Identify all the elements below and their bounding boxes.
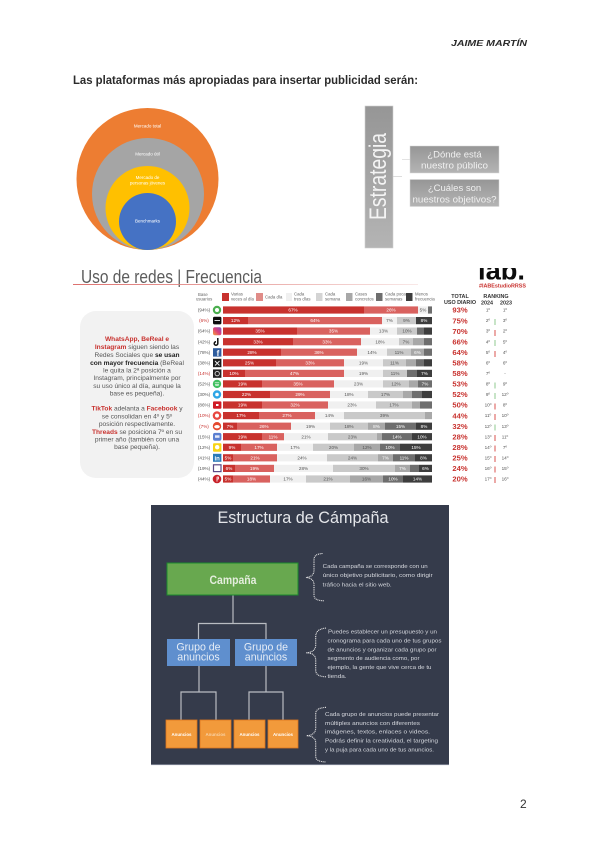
row: Reddit: 8% <box>373 424 380 429</box>
panel: social network frequency chart <box>73 256 526 484</box>
row: Reddit: 32% <box>452 422 468 431</box>
row: BeReal: 7% <box>386 318 393 323</box>
text: ads note <box>325 712 439 754</box>
text: ad group note: tienda. <box>328 674 347 680</box>
row: YouTube: 10º <box>485 403 492 408</box>
row: Twitch: 6% <box>422 466 429 471</box>
chart legend <box>196 292 435 302</box>
row: LinkedIn <box>198 454 509 462</box>
row: Instagram: 2º <box>503 329 507 334</box>
row: BeReal: 12% <box>231 318 240 323</box>
text: ads note: Podrás definir la creatividad, el targeting <box>325 738 438 744</box>
row: Threads: 58% <box>452 369 468 378</box>
row: YouTube: 50% <box>452 401 468 410</box>
row: Twitch: (19%) <box>198 466 211 471</box>
row: Telegram: 12º <box>502 392 509 397</box>
heading: platforms: Las plataformas más apropiadas para insertar publicidad serán: <box>73 75 418 87</box>
chart legend: concretos <box>355 296 374 302</box>
row: Discord: 14% <box>392 434 402 439</box>
callout: key findings: base pequeña). <box>114 444 160 451</box>
row: Pinterest: (44%) <box>198 477 211 482</box>
chart legend: Cada <box>325 292 336 296</box>
row: Reddit: 18% <box>344 424 354 429</box>
row: Instagram: 35% <box>329 329 338 334</box>
text: ad group note: segmento de audiencia como, por <box>328 656 420 662</box>
row: WhatsApp: 26% <box>386 308 396 313</box>
row: Facebook: f <box>217 349 220 358</box>
row: Reddit: 26% <box>259 424 269 429</box>
row: Twitch: 7% <box>399 466 406 471</box>
box: ad 4: Anuncios <box>273 732 294 737</box>
row: Facebook: 64% <box>452 348 468 357</box>
row: X: 25% <box>245 360 254 365</box>
row: LinkedIn: 8% <box>420 455 427 460</box>
row: Snapchat: 7º <box>503 445 507 450</box>
row: Pinterest: 18% <box>247 477 256 482</box>
text: ad group note: ejemplo, la gente que vive cerca de tu <box>328 665 432 671</box>
row: LinkedIn: 24% <box>348 455 357 460</box>
chart legend: Menos <box>415 292 428 296</box>
row: BeReal: 9% <box>403 318 410 323</box>
row: Discord: 13º <box>485 434 492 439</box>
row: TikTok: 33% <box>322 339 332 344</box>
row: Telegram: 18% <box>344 392 354 397</box>
row: Tinder-style app <box>198 411 509 420</box>
row: Twitch: 16º <box>485 466 492 471</box>
row: Facebook <box>198 348 507 358</box>
panel: campaign structure <box>151 505 449 765</box>
row: Tinder-style app: 39% <box>380 413 389 418</box>
strategy diagram: nuestro público <box>421 160 488 172</box>
brace: ad group note <box>306 628 326 677</box>
row: Facebook: 6% <box>414 350 421 355</box>
row: Twitch: 15º <box>502 466 509 471</box>
row: Instagram: 3º <box>486 329 490 334</box>
iab logo: iab. <box>478 256 525 286</box>
row: LinkedIn: 24% <box>297 455 307 460</box>
row: TikTok: 66% <box>452 337 468 346</box>
header: author name: JAIME MARTÍN <box>451 38 528 48</box>
row: Spotify: 7% <box>422 382 428 386</box>
row: Discord: 23% <box>348 434 357 439</box>
text: ad group note: cronograma para cada uno de tus grupos <box>328 638 442 644</box>
nested circles diagram: Mercado total <box>134 124 161 128</box>
row: Discord: 10% <box>417 434 427 439</box>
nested circles diagram: personas jóvenes <box>130 180 166 186</box>
row: Threads: 47% <box>290 371 299 376</box>
row: Reddit: 13º <box>502 424 509 429</box>
column headers: RANKING <box>483 294 509 300</box>
callout: key findings: su uso único al día, aunque la <box>93 383 181 390</box>
chart title: Uso de redes | Frecuencia <box>81 267 263 287</box>
callout: key findings: WhatsApp, BeReal e <box>105 336 169 343</box>
row: LinkedIn: 5% <box>225 455 231 460</box>
row: Spotify: 23% <box>354 382 363 386</box>
row: Telegram: 52% <box>452 390 468 399</box>
row: Pinterest <box>198 475 509 484</box>
box: ad group 1: Grupo de <box>176 642 221 654</box>
box: ad 4 <box>268 720 298 748</box>
row: Snapchat: 20% <box>329 445 338 450</box>
row: Spotify: 12% <box>391 382 401 386</box>
row: Reddit <box>199 422 509 431</box>
row: Reddit: 19% <box>306 424 315 429</box>
row: Telegram: (30%) <box>198 392 211 397</box>
row: Snapchat <box>198 443 507 452</box>
row: LinkedIn: in <box>215 456 220 462</box>
nested circles diagram: Mercado útil <box>135 152 160 156</box>
row: Telegram: 29% <box>295 392 305 397</box>
row: Twitch: 28% <box>299 466 308 471</box>
row: Snapchat: 14º <box>485 445 492 450</box>
row: Snapchat: (12%) <box>198 445 211 450</box>
callout: key findings: TikTok adelanta a Facebook y <box>91 406 183 412</box>
row: Snapchat: 10% <box>385 445 395 450</box>
row: Facebook: (78%) <box>198 350 211 355</box>
column headers: TOTAL <box>451 294 469 300</box>
row: YouTube: 8º <box>503 403 507 408</box>
row: Facebook: 14% <box>367 350 377 355</box>
row: Pinterest: 5% <box>225 477 231 482</box>
chart legend: Varias <box>231 292 243 296</box>
row: YouTube: 17% <box>389 403 399 408</box>
row: Tinder-style app: (10%) <box>198 413 211 418</box>
chart legend: Base <box>198 292 208 297</box>
chart legend: frecuencia <box>415 296 435 302</box>
chart legend: tres días <box>294 296 310 302</box>
row: Instagram: 70% <box>452 327 468 336</box>
row: X: 33% <box>305 360 315 365</box>
nested circles diagram: Benchmarks <box>135 218 161 224</box>
column headers: 2023 <box>500 300 512 306</box>
row: Discord <box>198 432 509 441</box>
callout: key findings: base es pequeña). <box>110 390 164 398</box>
box: ad group 1 <box>167 639 230 666</box>
chart legend: Cada <box>294 292 305 296</box>
connector lines <box>181 595 283 720</box>
strategy diagram: Estrategia <box>365 132 392 220</box>
row: X: 6º <box>486 360 490 365</box>
row: BeReal: 64% <box>310 318 320 323</box>
row: Spotify <box>198 380 507 389</box>
box: ad 3: Anuncios <box>239 732 260 737</box>
nested circles diagram <box>76 108 218 250</box>
chart legend: semanas <box>385 296 402 302</box>
row: Discord: 21% <box>301 434 311 439</box>
box: ad group 2 <box>235 639 297 666</box>
row: Twitch: 19% <box>250 466 259 471</box>
row: X: 58% <box>452 358 468 368</box>
box: ad 3 <box>234 720 265 748</box>
row: TikTok <box>198 337 507 346</box>
row: LinkedIn: 14º <box>502 455 509 460</box>
row: LinkedIn: (41%) <box>198 455 211 460</box>
row: Threads: 11% <box>391 371 399 376</box>
text: ads note: y la puja para cada uno de tus anuncios. <box>325 748 434 754</box>
callout: key findings: Threads se posiciona 7º en su <box>92 429 182 436</box>
row: LinkedIn: 15º <box>485 455 492 460</box>
row: LinkedIn: 11% <box>400 455 408 460</box>
row: Instagram: 35% <box>255 329 265 334</box>
row: Threads: 10% <box>229 371 239 376</box>
text: ads note: imágenes, textos, enlaces o videos. <box>325 730 431 736</box>
text: ads note: Cada grupo de anuncios puede presentar <box>325 712 439 718</box>
callout: key findings: primer año (también con una <box>95 436 179 444</box>
strategy diagram: ¿Cuáles son <box>428 183 481 194</box>
box: ad 2: Anuncios <box>205 732 226 737</box>
row: WhatsApp: 5% <box>420 308 426 313</box>
callout: key findings: Instagram, principalmente por <box>93 375 181 382</box>
row: WhatsApp: 1º <box>486 308 490 313</box>
row: Threads: (14%) <box>198 371 211 376</box>
row: Pinterest: 17º <box>485 477 492 482</box>
row: Instagram: (64%) <box>198 329 211 334</box>
row: X: 6º <box>503 360 507 365</box>
row: Facebook: 11% <box>395 350 403 355</box>
chart legend: veces al día <box>231 296 255 302</box>
row: Pinterest: 17% <box>283 477 293 482</box>
row: YouTube: (86%) <box>198 403 211 408</box>
row: YouTube <box>198 401 507 410</box>
box: ad 1 <box>166 720 197 748</box>
box: campaign: Campaña <box>210 575 257 587</box>
box: ad group 1: anuncios <box>177 652 220 664</box>
row: Facebook: 28% <box>247 350 257 355</box>
row: BeReal: 2º <box>486 318 490 323</box>
text: campaign note: único objetivo publicitario, como dirigir <box>323 573 433 579</box>
row: X: 19% <box>359 360 368 365</box>
row: X: 11% <box>390 360 399 365</box>
row: Discord: 11% <box>269 434 277 439</box>
column headers: USO DIARIO <box>444 300 476 306</box>
row: BeReal: 75% <box>452 316 468 325</box>
row: Tinder-style app: 17% <box>236 413 246 418</box>
row: Snapchat: 12% <box>362 445 372 450</box>
row: Spotify: 53% <box>452 380 468 389</box>
text: ad group note: de anuncios y organizar cada grupo por <box>328 648 437 654</box>
callout: key findings: posición respectivamente. <box>99 421 175 428</box>
chart legend: Cada pocas <box>385 292 408 296</box>
row: Spotify: (52%) <box>198 382 211 386</box>
text: ad group note: Puedes establecer un presupuesto y un <box>328 630 437 636</box>
row: TikTok: 5º <box>503 339 507 344</box>
row: Twitch: 30% <box>359 466 369 471</box>
row: Pinterest: 21% <box>323 477 333 482</box>
callout: key findings: le quita la 2ª posición a <box>103 368 171 374</box>
row: Threads <box>198 369 506 378</box>
row: LinkedIn: 21% <box>250 455 260 460</box>
row: Tinder-style app: 14% <box>325 413 334 418</box>
chart legend: semana <box>325 296 341 302</box>
strategy diagram <box>365 106 499 248</box>
row: Pinterest: 20% <box>452 475 468 484</box>
row: Pinterest: 14% <box>413 477 422 482</box>
row: Reddit: 7% <box>227 424 233 429</box>
box: ad group 2: Grupo de <box>244 642 288 654</box>
chart legend: usuarios <box>196 296 212 302</box>
row: Pinterest: 16% <box>362 477 371 482</box>
text: ad group note <box>328 630 442 680</box>
row: Telegram <box>198 390 509 399</box>
column headers: 2024 <box>481 300 493 306</box>
row: Telegram: 9º <box>486 392 490 397</box>
row: Discord: 28% <box>452 432 468 441</box>
brace: campaign note <box>306 554 324 601</box>
text: campaign note: Cada campaña se corresponde con un <box>323 564 428 570</box>
callout: key findings: Instagram siguen siendo las <box>95 344 180 351</box>
row: WhatsApp: 67% <box>288 308 298 313</box>
brace: ads note <box>306 707 326 762</box>
callout: key findings: se consolidan en 4º y 5º <box>102 414 173 420</box>
row: Tinder-style app: 27% <box>282 413 292 418</box>
page number: 2 <box>520 797 527 811</box>
row: X <box>198 358 507 368</box>
callout: key findings: con mayor frecuencia (BeReal <box>90 360 184 367</box>
row: TikTok: 7% <box>403 339 409 344</box>
row: Threads: 7% <box>421 371 428 376</box>
row: Pinterest: 10% <box>388 477 398 482</box>
row: Reddit: 12º <box>485 424 492 429</box>
row: Tinder-style app: 11º <box>485 413 492 418</box>
text: campaign note <box>323 564 433 588</box>
row: Instagram <box>198 327 507 336</box>
iab logo: #IABEstudioRRSS <box>479 284 526 290</box>
row: Facebook: 4º <box>503 350 507 355</box>
panel title: Estructura de Cámpaña <box>218 508 389 527</box>
row: Twitch <box>198 464 509 473</box>
box: campaign <box>167 563 298 595</box>
row: LinkedIn: 7% <box>382 455 389 460</box>
column headers <box>444 294 512 306</box>
row: Threads: 7º <box>486 371 490 376</box>
row: Snapchat: 28% <box>452 443 468 452</box>
row: BeReal: (6%) <box>199 318 209 323</box>
row: YouTube: 19% <box>238 403 247 408</box>
row: Facebook: 5º <box>486 350 490 355</box>
row: Discord: 19% <box>238 434 247 439</box>
chart legend: Cada día <box>265 294 283 300</box>
row: WhatsApp: (94%) <box>198 308 211 313</box>
row: WhatsApp: 93% <box>452 306 468 315</box>
row: Twitch: 6% <box>226 466 232 471</box>
row: Twitch: 24% <box>452 464 468 473</box>
row: BeReal: 8% <box>421 318 427 323</box>
row: WhatsApp: 1º <box>503 308 507 313</box>
row: Pinterest: 16º <box>502 477 509 482</box>
row: Snapchat: 15% <box>411 445 421 450</box>
row: Spotify: 9º <box>503 382 507 386</box>
row: LinkedIn: 25% <box>452 454 468 462</box>
row: TikTok: 18% <box>375 339 385 344</box>
row: Discord: 11º <box>502 434 509 439</box>
row: Spotify: 8º <box>486 382 490 386</box>
strategy diagram: nuestros objetivos? <box>412 194 496 206</box>
row: TikTok: 4º <box>486 339 490 344</box>
row: Reddit: (7%) <box>199 424 209 429</box>
row: Discord: (15%) <box>198 434 211 439</box>
row: Tinder-style app: 44% <box>452 411 468 420</box>
row: YouTube: 23% <box>347 403 357 408</box>
row: Telegram: 22% <box>242 392 251 397</box>
nested circles diagram: Mercado de <box>136 175 160 180</box>
row: Snapchat: 17% <box>290 445 300 450</box>
row: Snapchat: 17% <box>254 445 264 450</box>
row: Threads: 19% <box>359 371 368 376</box>
row: TikTok: (42%) <box>198 339 211 344</box>
row: Instagram: 10% <box>402 329 412 334</box>
callout: key findings <box>80 311 194 478</box>
text: campaign note: tráfico hacia el sitio web. <box>323 582 392 588</box>
row: YouTube: 32% <box>290 403 300 408</box>
chart legend: Cases <box>355 292 367 296</box>
row: X: (38%) <box>198 360 211 365</box>
row: Spotify: 35% <box>293 382 303 386</box>
row: Threads: - <box>504 371 506 376</box>
callout: key findings: Redes Sociales que se usan <box>94 352 180 359</box>
row: BeReal: 3º <box>503 318 507 323</box>
row: BeReal <box>199 316 507 325</box>
iab logo <box>479 268 526 288</box>
box: ad 1: Anuncios <box>171 732 192 737</box>
row: Tinder-style app: 10º <box>502 413 509 418</box>
row: Spotify: 19% <box>238 382 247 386</box>
row: Facebook: 36% <box>314 350 324 355</box>
box: ad 2 <box>200 720 231 748</box>
row: Reddit: 15% <box>396 424 405 429</box>
row: Reddit: 8% <box>421 424 427 429</box>
row: Telegram: 17% <box>381 392 390 397</box>
box: ad group 2: anuncios <box>245 652 287 664</box>
text: ads note: múltiples anuncios con diferentes <box>325 721 420 727</box>
strategy diagram: ¿Dónde está <box>427 150 482 160</box>
row: WhatsApp <box>198 306 507 315</box>
row: Snapchat: 9% <box>229 445 235 450</box>
row: Instagram: 13% <box>379 329 388 334</box>
row: TikTok: 33% <box>253 339 263 344</box>
